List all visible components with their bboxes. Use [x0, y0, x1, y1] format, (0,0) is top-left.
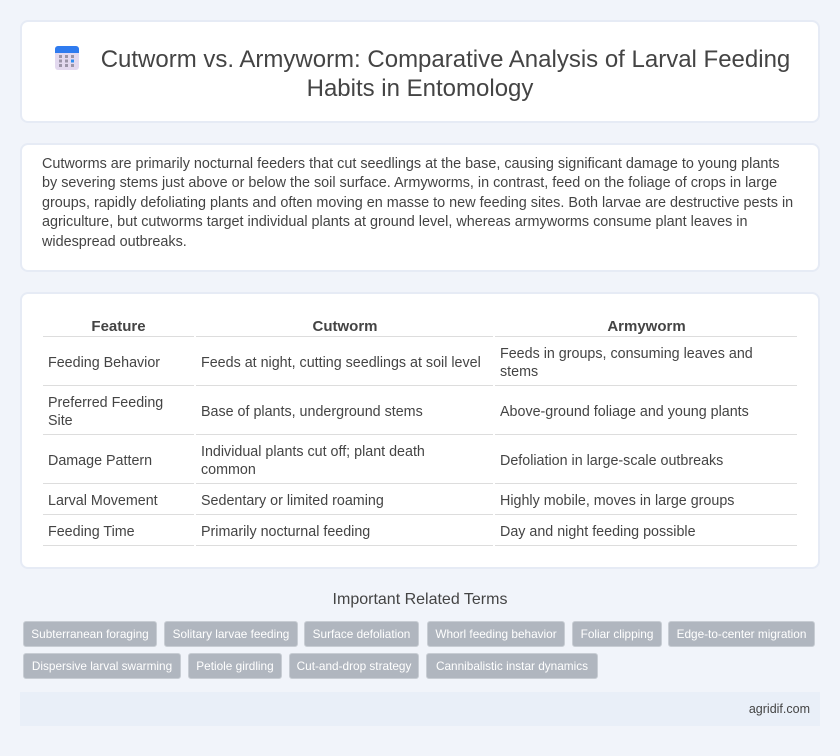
- tag: [304, 621, 419, 647]
- tag: [23, 621, 157, 647]
- description text: by severing stems just above or below the soil surface. Armyworms, in contrast, feed on the foliage of crops in large: [42, 175, 777, 191]
- row: larval movement: [48, 493, 734, 509]
- row: feeding time: Day and night feeding possible: [500, 524, 696, 540]
- row: preferred feeding site: Base of plants, underground stems: [201, 404, 423, 420]
- row: feeding time: Primarily nocturnal feeding: [201, 524, 370, 540]
- row: feeding behavior: [48, 346, 753, 380]
- row: damage pattern: Defoliation in large-scale outbreaks: [500, 453, 723, 469]
- tag: [668, 621, 815, 647]
- tag: Surface defoliation: [313, 627, 410, 641]
- description text: groups, rapidly defoliating plants and often moving en masse to new feeding sites. Both larvae are destructive pests in: [42, 195, 793, 211]
- description text: [42, 156, 793, 250]
- related terms heading: Important Related Terms: [333, 591, 507, 608]
- row: larval movement: Sedentary or limited roaming: [201, 493, 384, 509]
- tag: Dispersive larval swarming: [32, 659, 172, 673]
- title: Habits in Entomology: [307, 75, 533, 102]
- row: preferred feeding site: [48, 395, 749, 429]
- footer bar: [20, 692, 820, 726]
- row: feeding behavior: stems: [500, 364, 538, 380]
- tag: [23, 653, 181, 679]
- description card: [20, 143, 820, 272]
- row: damage pattern: Damage Pattern: [48, 453, 152, 469]
- table header: Armyworm: [607, 318, 686, 335]
- tag: Solitary larvae feeding: [173, 627, 289, 641]
- row: damage pattern: Individual plants cut off; plant death: [201, 444, 425, 460]
- row: feeding time: Feeding Time: [48, 524, 135, 540]
- title: Cutworm vs. Armyworm: Comparative Analysis of Larval Feeding: [101, 46, 790, 73]
- row: damage pattern: common: [201, 462, 256, 478]
- tag: [289, 653, 419, 679]
- description text: agriculture, but cutworms target individual plants at ground level, whereas armyworms consume plant leaves in: [42, 214, 747, 230]
- tag: Cannibalistic instar dynamics: [436, 659, 588, 673]
- tag: Edge-to-center migration: [677, 627, 806, 641]
- title card: [20, 20, 820, 123]
- row: damage pattern: [48, 444, 723, 478]
- row: preferred feeding site: Above-ground foliage and young plants: [500, 404, 749, 420]
- footer source text: agridif.com: [749, 702, 810, 716]
- table header: [91, 318, 686, 335]
- row: feeding time: [48, 524, 696, 540]
- icon: calendar: [55, 46, 79, 70]
- row: feeding behavior: Feeds at night, cutting seedlings at soil level: [201, 355, 481, 371]
- tag: Petiole girdling: [196, 659, 274, 673]
- row: larval movement: Highly mobile, moves in large groups: [500, 493, 734, 509]
- related terms tags: [23, 621, 815, 679]
- row: preferred feeding site: Preferred Feeding: [48, 395, 163, 411]
- tag: Cut-and-drop strategy: [297, 659, 411, 673]
- row: feeding behavior: Feeds in groups, consuming leaves and: [500, 346, 753, 362]
- row: larval movement: Larval Movement: [48, 493, 158, 509]
- tag: [164, 621, 298, 647]
- tag: [427, 621, 565, 647]
- comparison table card: [20, 292, 820, 569]
- table header: Cutworm: [312, 318, 378, 335]
- description text: Cutworms are primarily nocturnal feeders that cut seedlings at the base, causing significant damage to young plants: [42, 156, 780, 172]
- tag: Subterranean foraging: [31, 627, 149, 641]
- tag: Whorl feeding behavior: [435, 627, 557, 641]
- row: feeding behavior: Feeding Behavior: [48, 355, 160, 371]
- tag: [426, 653, 598, 679]
- tag: [188, 653, 282, 679]
- table header: Feature: [91, 318, 146, 335]
- tag: Foliar clipping: [581, 627, 653, 641]
- tag: [572, 621, 662, 647]
- description text: widespread outbreaks.: [42, 234, 187, 250]
- title: [101, 46, 790, 102]
- row: preferred feeding site: Site: [48, 413, 73, 429]
